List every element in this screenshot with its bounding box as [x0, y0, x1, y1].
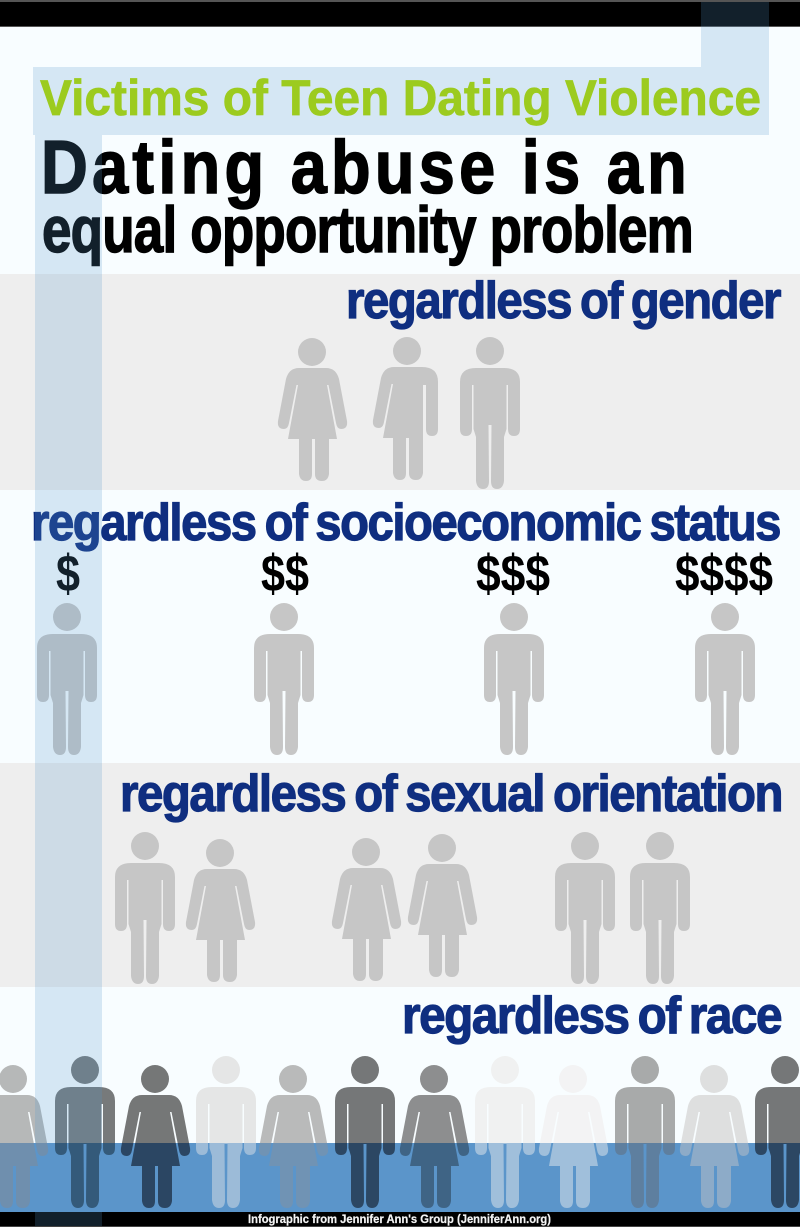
panel: gender background — [0, 274, 800, 490]
icon: woman — [278, 338, 347, 481]
footer credit: Infographic from Jennifer Ann's Group (JenniferAnn.org) — [248, 1214, 551, 1226]
icon: mixed gender person — [373, 337, 438, 480]
icon: person one — [37, 603, 97, 755]
panel: sexual orientation background — [0, 763, 800, 987]
left vertical strip — [35, 135, 102, 1143]
icon: man — [460, 337, 520, 489]
icon: woman — [186, 839, 255, 982]
icon: man — [630, 832, 690, 984]
icons: row of people, upper part — [0, 1056, 800, 1143]
label: two dollars: $$ — [261, 545, 309, 603]
label: three dollars: $$$ — [476, 545, 550, 603]
icon: person four — [695, 603, 755, 755]
label: four dollars: $$$$ — [675, 545, 773, 603]
top black bar — [0, 0, 800, 27]
bottom black bar — [0, 1212, 800, 1227]
icons: row of people, lower part over band — [0, 1143, 800, 1208]
headline line 1: Dating abuse is an — [41, 125, 691, 209]
icon: woman — [332, 838, 401, 981]
dollar signs row — [56, 545, 773, 603]
icon: woman — [408, 834, 477, 977]
icon: man — [555, 832, 615, 984]
label: one dollar: $ — [56, 545, 80, 603]
blue band — [0, 1143, 800, 1212]
icon: person two — [254, 603, 314, 755]
title band — [33, 2, 769, 135]
icon: person three — [484, 603, 544, 755]
icons: orientation couples — [115, 832, 690, 984]
icon: man — [115, 832, 175, 984]
icons: gender figures — [278, 337, 520, 489]
icons: socioeconomic figures — [37, 603, 755, 755]
title: Victims of Teen Dating Violence — [40, 70, 761, 126]
bottom strip tint — [35, 1212, 102, 1226]
